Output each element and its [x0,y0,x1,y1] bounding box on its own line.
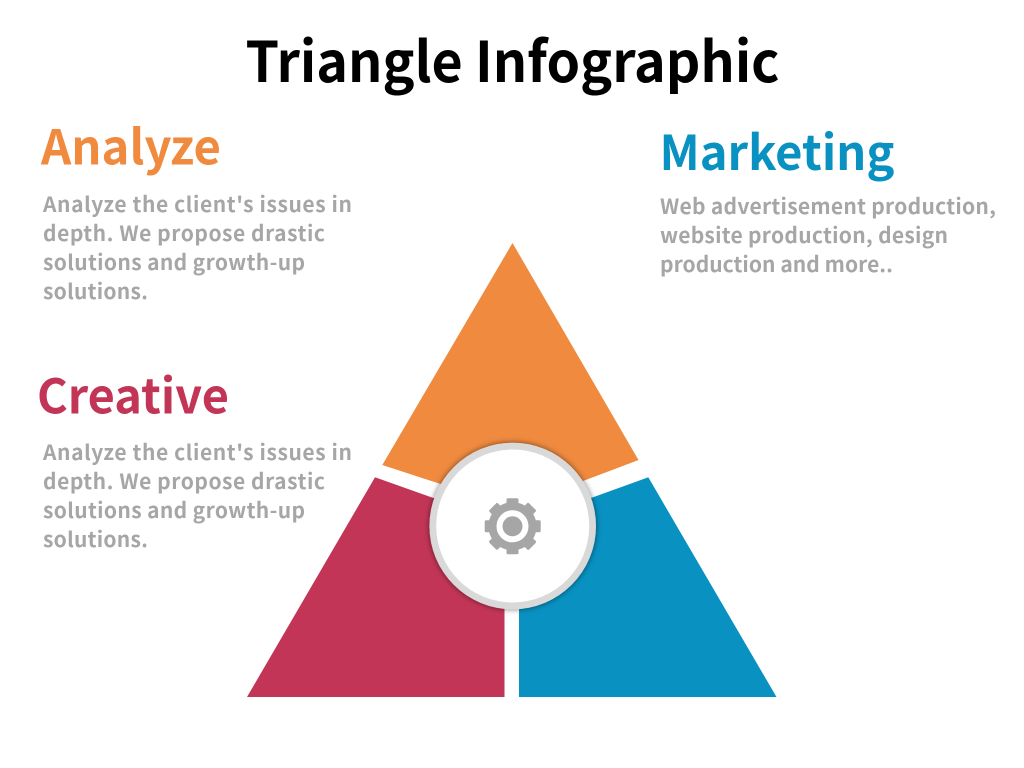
panel: crimson left segment [247,477,504,697]
text block: Creative description: solutions. [43,524,148,554]
text block: Analyze description: solutions and growth-up [43,247,305,277]
text block: Creative description: solutions and growth-up [43,495,305,525]
heading: Marketing: Marketing [660,114,894,184]
text block: Creative description [42,437,352,554]
text block: Marketing description: production and more.. [660,249,893,279]
center circle [429,443,596,609]
text block: Marketing description: Web advertisement production, [660,191,996,221]
text block: Analyze description: Analyze the client's issues in [42,189,352,219]
heading: Creative: Creative [37,358,229,428]
triangle diagram [247,243,776,697]
text block: Analyze description [42,189,352,306]
text block: Analyze description: solutions. [43,276,148,306]
text block: Marketing description: website production, design [660,220,948,250]
text block: Creative description: depth. We propose drastic [43,466,325,496]
heading: Analyze: Analyze [40,108,221,178]
title: Triangle Infographic [246,18,780,99]
text block: Marketing description [660,191,996,279]
panel: blue right segment [519,477,776,697]
text block: Analyze description: depth. We propose drastic [43,218,325,248]
panel: orange top segment [382,243,638,500]
icon: gear [485,498,541,554]
text block: Creative description: Analyze the client's issues in [42,437,352,467]
